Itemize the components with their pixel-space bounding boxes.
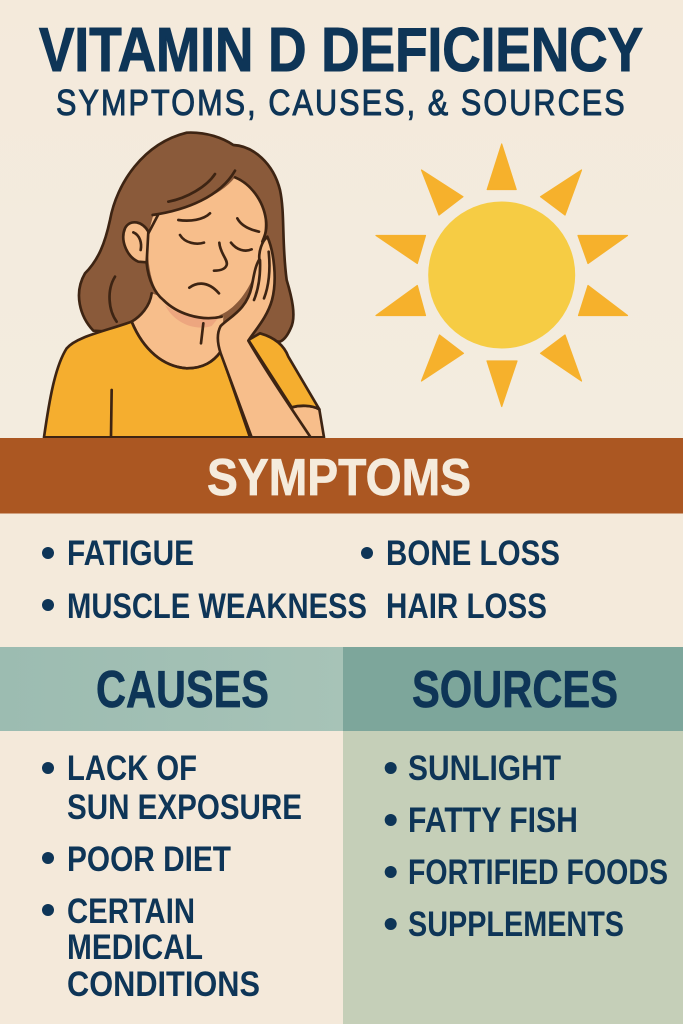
- cause: poor diet: POOR DIET: [67, 839, 231, 879]
- panel: symptoms list: [0, 514, 683, 647]
- fringe strand: [168, 174, 215, 202]
- cause: certain medical conditions: CERTAIN: [67, 891, 195, 931]
- symptom: hair loss: HAIR LOSS: [386, 586, 547, 626]
- bullet: sunlight: [385, 762, 397, 774]
- bullet: supplements: [385, 918, 397, 930]
- bullet: muscle weakness: [42, 599, 54, 611]
- nose: [214, 243, 227, 271]
- bullet: poor diet: [42, 852, 54, 864]
- causes heading: CAUSES: [96, 661, 269, 719]
- sun rays: [376, 144, 628, 406]
- ear: [123, 222, 148, 262]
- source: supplements: SUPPLEMENTS: [408, 904, 624, 944]
- neck line: [201, 323, 203, 343]
- frown: [189, 284, 219, 293]
- hair: [79, 133, 293, 342]
- cause: certain medical conditions: CONDITIONS: [67, 964, 260, 1004]
- eyebrows: [178, 213, 259, 232]
- symptoms heading: SYMPTOMS: [207, 449, 471, 507]
- bullet: certain medical conditions: [42, 904, 54, 916]
- symptom: muscle weakness: MUSCLE WEAKNESS: [67, 586, 367, 626]
- shirt fold: [107, 390, 116, 437]
- cause: certain medical conditions: MEDICAL: [67, 927, 203, 967]
- illustration: tired woman resting her cheek on her hand: [44, 133, 324, 437]
- source: fatty fish: FATTY FISH: [408, 800, 578, 840]
- neck shadow: [165, 305, 220, 328]
- neckline of shirt: [132, 322, 221, 368]
- symptom: bone loss: BONE LOSS: [386, 533, 560, 573]
- closed eyes: [180, 235, 252, 251]
- hand and forearm: [218, 237, 311, 437]
- bullet: bone loss: [361, 547, 373, 559]
- cause: lack of sun exposure: LACK OF: [67, 748, 197, 788]
- sources heading: SOURCES: [412, 661, 618, 719]
- bullet: fortified foods: [385, 866, 397, 878]
- shirt sleeve: [248, 333, 319, 409]
- jaw outline: [147, 263, 222, 318]
- panel: sources: [343, 647, 683, 1024]
- bullet: fatty fish: [385, 814, 397, 826]
- symptom: fatigue: FATIGUE: [67, 533, 194, 573]
- fingers: [254, 252, 269, 300]
- source: sunlight: SUNLIGHT: [408, 748, 561, 788]
- neck: [132, 293, 223, 368]
- inner ear: [133, 232, 141, 250]
- hairline: [148, 171, 235, 233]
- bullet: fatigue: [42, 547, 54, 559]
- hair strand: [110, 277, 117, 322]
- shirt: [44, 322, 250, 437]
- face side outline: [235, 177, 266, 242]
- bullet: lack of sun exposure: [42, 762, 54, 774]
- forearm below sleeve: [292, 406, 324, 437]
- face: [148, 177, 265, 317]
- panel: symptoms header band: [0, 438, 683, 514]
- hair edge along neck: [132, 293, 152, 322]
- sun: [376, 144, 628, 406]
- cause: lack of sun exposure: SUN EXPOSURE: [67, 787, 302, 827]
- panel: causes: [0, 647, 343, 1024]
- subtitle: SYMPTOMS, CAUSES, & SOURCES: [56, 84, 625, 124]
- sun disc: [428, 202, 575, 348]
